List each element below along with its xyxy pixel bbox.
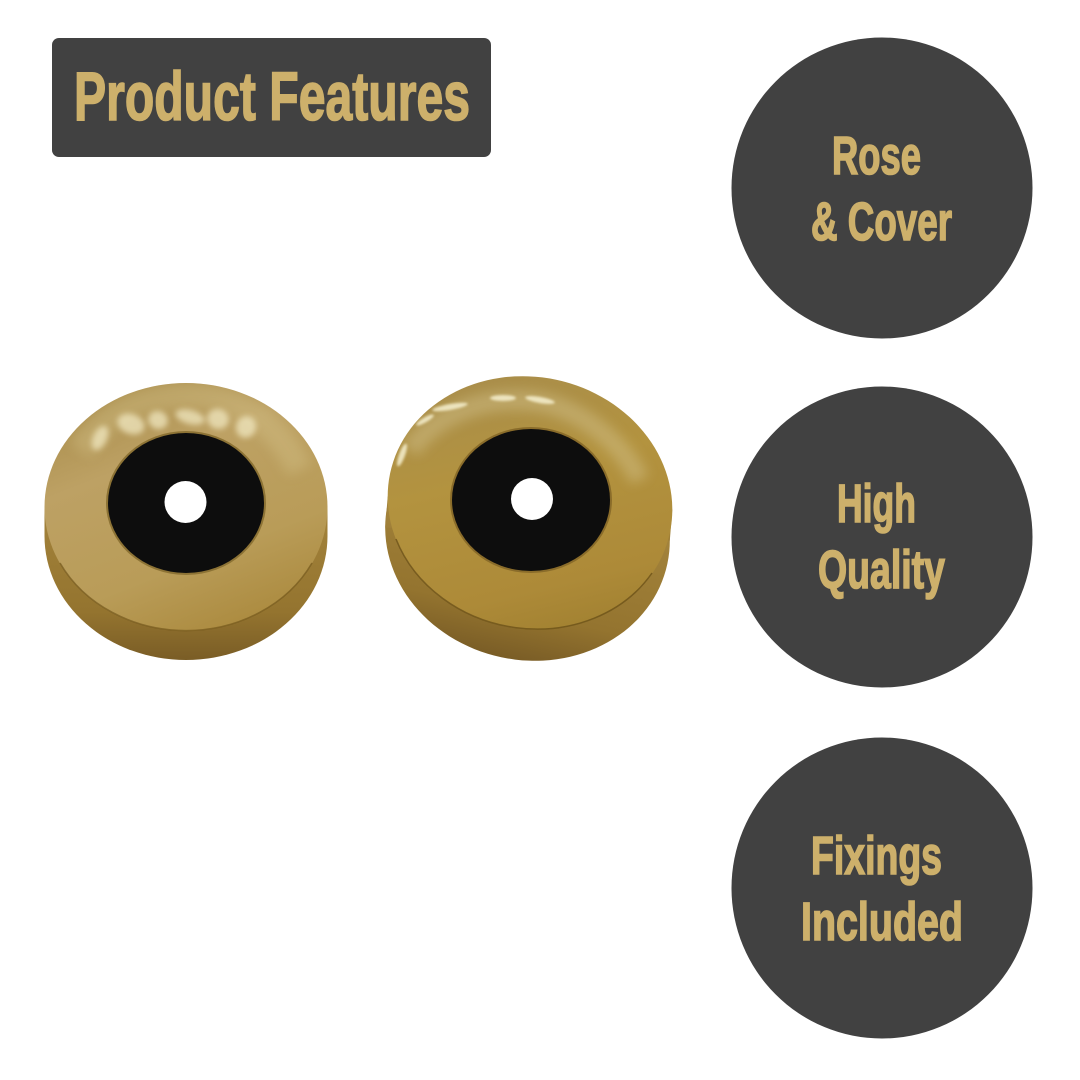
label line: Included: Included bbox=[801, 892, 963, 952]
label line: Rose: Rose bbox=[832, 126, 921, 186]
right cover sheen bbox=[410, 400, 640, 480]
left cover sheen bbox=[80, 395, 300, 470]
feature badge: Rose & Cover bbox=[732, 38, 1032, 338]
right cover inner rim bbox=[450, 427, 612, 573]
label line: Quality: Quality bbox=[818, 540, 945, 600]
title text: Product Features bbox=[74, 58, 470, 135]
left cover black washer bbox=[108, 433, 264, 573]
right cover black washer bbox=[452, 429, 610, 571]
right cover side wall bbox=[361, 381, 694, 687]
product: right gold rose cover bbox=[385, 376, 672, 661]
left cover highlights bbox=[88, 406, 259, 453]
title banner bbox=[52, 38, 491, 157]
right cover highlights bbox=[395, 394, 555, 467]
feature badge: Fixings Included bbox=[732, 738, 1032, 1038]
right cover top face bbox=[364, 350, 696, 656]
right cover centre hole bbox=[511, 478, 553, 520]
feature badge: High Quality bbox=[732, 386, 1032, 688]
label line: & Cover: & Cover bbox=[811, 192, 952, 252]
left cover top face bbox=[44, 383, 328, 631]
right cover lower rim line bbox=[396, 539, 652, 629]
label line: High: High bbox=[837, 474, 916, 534]
left cover side wall bbox=[44, 507, 328, 660]
label line: Fixings: Fixings bbox=[811, 826, 942, 886]
product: left gold rose cover bbox=[44, 383, 328, 660]
left cover centre hole bbox=[164, 481, 206, 523]
left cover lower rim line bbox=[60, 563, 312, 631]
left cover inner rim bbox=[106, 431, 266, 575]
